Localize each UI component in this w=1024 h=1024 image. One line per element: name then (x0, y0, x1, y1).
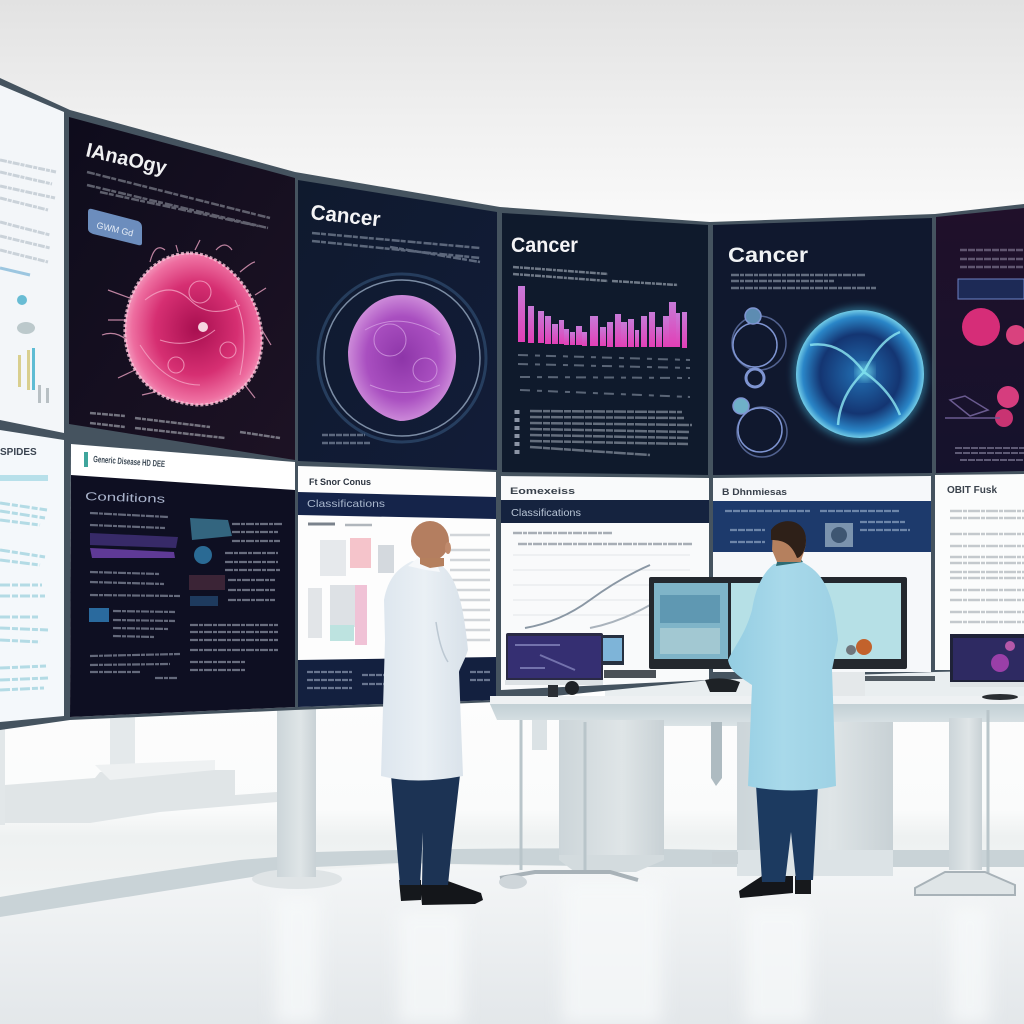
panel: dashboard screen (713, 476, 931, 672)
header strip text: Eomexeiss (510, 486, 575, 497)
floor (0, 864, 1024, 1024)
panel: dark conditions screen (70, 444, 295, 717)
panel: line chart screen (501, 476, 709, 690)
heading: SPIDES (0, 447, 37, 458)
panel: white left upper (0, 85, 64, 433)
panel: bar chart screen (502, 213, 708, 475)
text block: chart intro (513, 267, 678, 285)
bar chart (518, 286, 687, 348)
desk back area (605, 668, 1024, 700)
line chart (513, 555, 690, 628)
monitor: small purple left (505, 633, 656, 697)
heading: conditions: Conditions (85, 491, 166, 506)
scientist: blue coat (728, 521, 838, 898)
icon: purple cell in ring (318, 274, 486, 442)
text block: left column (90, 513, 180, 678)
heading: cancer: Cancer (511, 234, 578, 257)
text block: chart notes (513, 533, 692, 544)
panel: purple cell (298, 180, 497, 470)
legend row (518, 355, 690, 397)
text block: dashboard (725, 511, 910, 542)
text block: intro (87, 172, 270, 228)
panel: pink cell (69, 117, 295, 460)
panel: table screen (298, 466, 496, 707)
text block: header (960, 250, 1024, 267)
badge (88, 209, 142, 245)
panel: white left lower (0, 430, 64, 722)
icon: purple scan (89, 518, 232, 622)
monitor: large double display (649, 577, 935, 696)
heading: conditions: Classifications (307, 498, 385, 510)
ceiling wall (0, 0, 1024, 240)
scientist: white coat (381, 521, 483, 905)
panel: right dark screen (936, 208, 1024, 473)
monitor: small purple right (950, 634, 1024, 700)
text block: right column (190, 524, 282, 670)
floor base band (0, 848, 1024, 917)
heading: conditions: Classifications (511, 508, 581, 519)
text block: footer (90, 413, 280, 438)
badge: GWM Gd (96, 220, 134, 238)
icon: blue sphere (793, 307, 927, 441)
icon: pink cells (945, 308, 1024, 427)
header strip text: B Dhnmiesas (722, 487, 787, 498)
heading: OBIT Fusk (947, 485, 997, 496)
text block: footer (307, 672, 490, 688)
text block: footer (322, 435, 370, 443)
icon: outlined organelles (732, 308, 787, 457)
panel: white right lower (935, 474, 1024, 670)
text block: intro (312, 233, 480, 262)
text block: intro (731, 275, 876, 288)
table structure (490, 696, 1024, 895)
glass balustrade behind the screens (0, 700, 1024, 920)
table (308, 524, 490, 645)
heading: cancer: Cancer (309, 201, 381, 231)
text block (950, 511, 1024, 622)
panel: blue sphere screen (713, 218, 932, 475)
header strip text: Generic Disease HD DEE (93, 454, 165, 469)
text block: notes (955, 448, 1024, 460)
screen support column (252, 705, 342, 889)
data wall frame (0, 78, 1024, 730)
heading: anatomy: IAnaOgy (84, 139, 170, 180)
icon: pink cancer cell (102, 240, 271, 405)
callout box (958, 279, 1024, 299)
heading: cancer: Cancer (728, 244, 808, 267)
floor reflections (275, 880, 990, 1024)
header strip text: Ft Snor Conus (309, 477, 371, 488)
text block: chart notes (530, 411, 692, 455)
